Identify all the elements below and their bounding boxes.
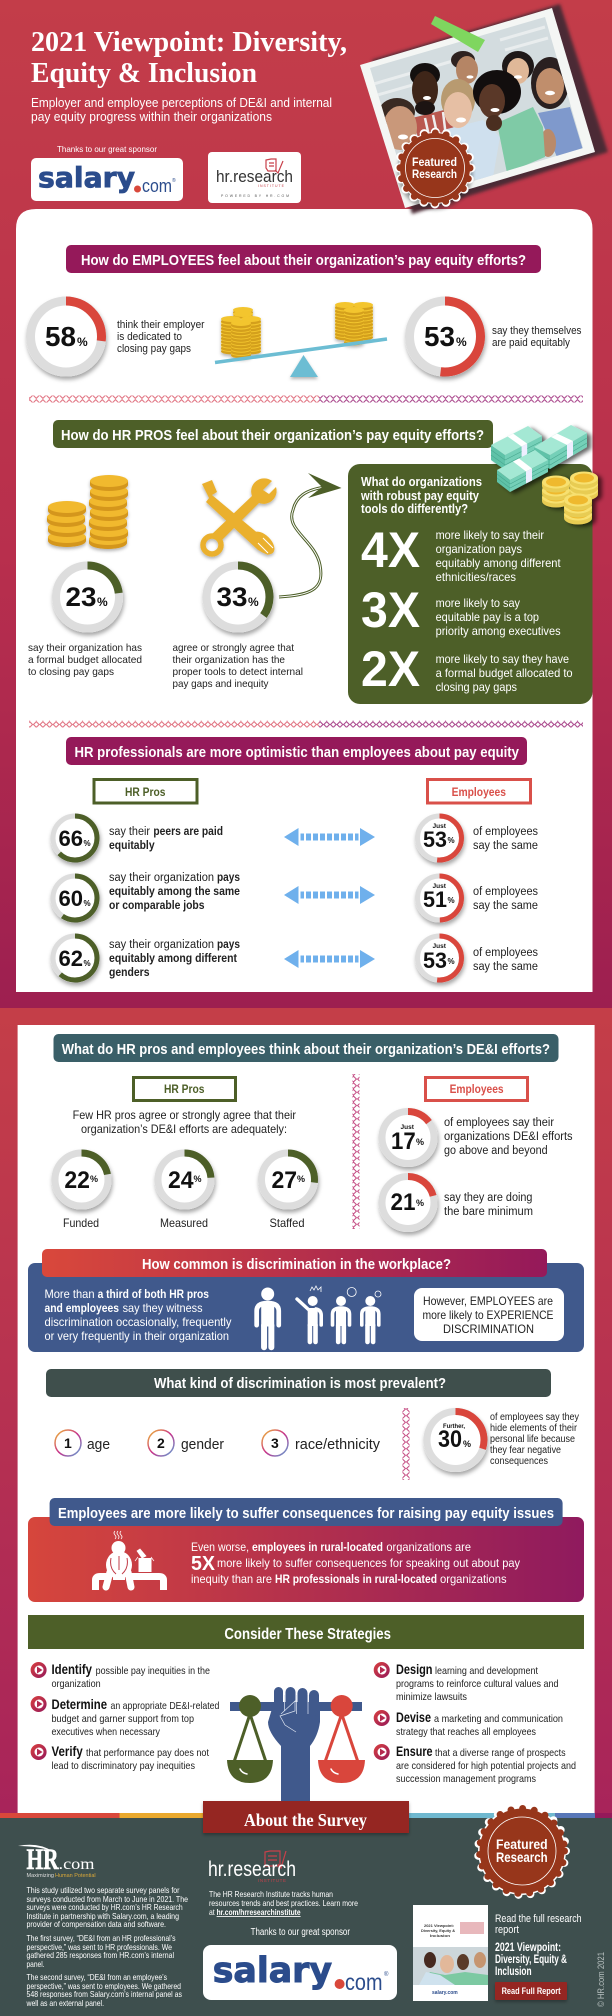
donut: 24 percent measured: Measured xyxy=(160,1216,208,1230)
text: read the full report: report xyxy=(495,1924,519,1936)
comparison row 3 employees: Just xyxy=(432,943,447,950)
text: 23 percent: a formal budget allocated xyxy=(28,654,142,666)
logo: HR.com: HR xyxy=(26,1843,59,1876)
text: 53 percent: say they themselves xyxy=(492,325,582,337)
heading: consequences: Employees are more likely to suffer consequences for raising pay equity issues xyxy=(58,1505,554,1522)
heading: employees xyxy=(66,245,541,273)
stat: 4X xyxy=(361,522,561,584)
comparison row 3 employees: say the same xyxy=(473,961,538,973)
logo: hr research xyxy=(208,152,301,203)
text: 30 percent: hide elements of their xyxy=(490,1423,578,1434)
rank 3 race/ethnicity: race/ethnicity xyxy=(295,1436,380,1453)
panel: consequences xyxy=(28,1498,584,1602)
footer color strip xyxy=(0,1813,612,1818)
text: consequences: organizations are xyxy=(386,1540,471,1554)
arrow: tools to panel xyxy=(279,473,342,597)
comparison row 2 employees: say the same xyxy=(473,900,538,912)
donut: 33 percent: 33 xyxy=(216,582,248,612)
text: institute description: The HR Research Institute tracks human xyxy=(209,1889,333,1899)
donut: 21 percent xyxy=(378,1173,438,1232)
featured research badge footer: Featured xyxy=(496,1836,548,1852)
comparison row 2 employees: of employees xyxy=(473,886,538,898)
logo: salary.com footer: ® xyxy=(384,1971,389,1978)
donut: 21 percent: 21 xyxy=(390,1189,416,1216)
text: 23 percent: to closing pay gaps xyxy=(28,666,114,678)
comparison row 3 employees xyxy=(415,934,538,982)
text: consequences: more likely to suffer consequences for speaking out about pay xyxy=(217,1556,520,1570)
text: discrimination witness: say they witness xyxy=(123,1301,203,1315)
text: read the full report: Diversity, Equity & xyxy=(495,1954,567,1966)
logo: salary.com: ® xyxy=(172,177,176,184)
text: discrimination witness: a third of both HR pros xyxy=(98,1287,209,1301)
label: Employees xyxy=(426,1078,528,1100)
strategy: devise: a marketing and communication xyxy=(434,1713,563,1725)
comparison row 1 HR: equitably xyxy=(109,840,155,852)
stat: 4X: ethnicities/races xyxy=(436,570,516,584)
label: HR Pros xyxy=(94,780,197,803)
logo: salary.com: com xyxy=(142,176,172,196)
comparison row 1 employees: % xyxy=(448,836,455,845)
text: study description: well as an external panel. xyxy=(26,1999,104,2008)
rank 2 gender: gender xyxy=(181,1436,224,1453)
comparison row 3 HR: say their organization xyxy=(109,939,214,951)
heading: consequences xyxy=(50,1498,563,1526)
donut: 53 percent xyxy=(405,296,485,376)
text: few HR pros: organization’s DE&I efforts are adequately: xyxy=(81,1122,287,1136)
button: read full report: Read Full Report xyxy=(502,1986,561,1997)
comparison row 3 HR: % xyxy=(84,959,91,968)
stat: 4X: 4X xyxy=(361,522,420,578)
strategy: determine: an appropriate DE&I-related xyxy=(110,1700,220,1712)
report cover thumbnail: 2021 Viewpoint: xyxy=(424,1923,454,1928)
report cover thumbnail: Diversity, Equity & xyxy=(421,1928,455,1933)
logo: hr research footer: INSTITUTE xyxy=(258,1878,286,1883)
strategy: devise: strategy that reaches all employees xyxy=(396,1726,536,1738)
strategy: ensure: that a diverse range of prospects xyxy=(435,1747,566,1759)
text: study description: provider of compensation data and software. xyxy=(26,1920,166,1929)
icon: coin stacks xyxy=(47,475,128,549)
icon: gold coins on panel xyxy=(542,472,598,524)
sponsor thanks text: Thanks to our great sponsor xyxy=(57,144,157,154)
comparison row 3 HR: 62 xyxy=(58,946,83,971)
donut: 30 percent xyxy=(424,1408,488,1472)
stat: 4X: equitably among different xyxy=(436,556,561,570)
donut: 21 percent: % xyxy=(416,1198,424,1208)
icon: sitting person xyxy=(96,1531,164,1590)
comparison row 3 HR: genders xyxy=(109,967,150,979)
stat: 2X: 2X xyxy=(361,641,420,697)
donut: 24 percent measured: % xyxy=(194,1174,202,1184)
donut: 27 percent staffed: 27 xyxy=(272,1167,297,1194)
text: 30 percent: of employees say they xyxy=(490,1412,579,1423)
text: 30 percent: personal life because xyxy=(490,1434,575,1445)
donut: 27 percent staffed xyxy=(258,1150,318,1230)
callout: experience discrimination: more likely to EXPERIENCE xyxy=(422,1308,554,1322)
donut: 30 percent: 30 xyxy=(438,1426,462,1453)
subtitle: pay equity progress within their organizations xyxy=(31,109,272,124)
heading: discrimination xyxy=(42,1249,547,1277)
logo: hr research footer xyxy=(208,1851,296,1883)
text: study description: panel. xyxy=(26,1960,44,1969)
strategy: design: minimize lawsuits xyxy=(396,1691,467,1703)
green panel: robust tools: with robust pay equity xyxy=(360,488,480,503)
comparison row 2 employees: Just xyxy=(432,883,447,890)
text: 33 percent: proper tools to detect internal xyxy=(172,666,303,678)
strategy: determine: executives when necessary xyxy=(52,1726,161,1738)
label: HR Pros: HR Pros xyxy=(164,1082,205,1096)
ribbon: about the survey xyxy=(203,1801,409,1833)
text: few HR pros: Few HR pros agree or strongly agree that their xyxy=(73,1108,296,1122)
heading: HR pros: How do HR PROS feel about their organization’s pay equity efforts? xyxy=(61,427,484,444)
rank 3 race/ethnicity xyxy=(262,1430,380,1456)
stat: 2X: closing pay gaps xyxy=(436,680,517,694)
text: study description: perspective,” was sent to HR professionals. We xyxy=(26,1943,172,1952)
donut: 23 percent: 23 xyxy=(66,582,96,612)
donut: 58 percent: 58 xyxy=(45,321,76,352)
text: 58 percent: closing pay gaps xyxy=(117,343,191,355)
icon: wrench and fork crossed xyxy=(202,478,279,559)
callout: experience discrimination: However, EMPLOYEES are xyxy=(423,1294,553,1308)
heading: HR pros xyxy=(53,420,493,448)
text: study description: This study utilized two separate survey panels for xyxy=(26,1886,180,1895)
subtitle: Employer and employee perceptions of DE&I and internal xyxy=(31,95,332,110)
stat: 4X: organization pays xyxy=(436,542,522,556)
featured research badge xyxy=(397,132,473,210)
label: Employees: Employees xyxy=(450,1082,504,1096)
text: study description: 548 responses from Salary.com’s internal panel as xyxy=(26,1990,182,1999)
comparison row 1 HR: 66 xyxy=(58,826,83,851)
text: consequences: Even worse, xyxy=(191,1540,249,1554)
comparison row 1 HR: % xyxy=(84,839,91,848)
text: 58 percent: think their employer xyxy=(117,319,205,331)
callout: experience discrimination: DISCRIMINATION xyxy=(443,1322,534,1336)
donut: 17 percent: % xyxy=(416,1137,424,1147)
text: discrimination witness: discrimination occasionally, frequently xyxy=(44,1315,232,1329)
logo: HR.com: Maximizing xyxy=(26,1873,54,1879)
text: consequences: HR professionals in rural-located xyxy=(275,1572,437,1586)
comparison row 1 employees: 53 xyxy=(423,827,447,852)
icon: fist holding scales xyxy=(227,1687,365,1803)
label: Employees xyxy=(428,780,530,803)
comparison row 2 HR: or comparable jobs xyxy=(109,900,204,912)
strategy: design: Design xyxy=(396,1661,432,1677)
text: institute description: hr.com/hrresearchinstitute xyxy=(217,1907,301,1917)
text: study description xyxy=(26,1886,188,2008)
strategy: identify: organization xyxy=(52,1678,101,1690)
stat: 4X: more likely to say their xyxy=(436,528,544,542)
text: 53 percent: are paid equitably xyxy=(492,337,570,349)
text: 17 percent: go above and beyond xyxy=(444,1145,548,1157)
strategy: verify: that performance pay does not xyxy=(86,1747,209,1759)
strategy: determine: budget and garner support from top xyxy=(52,1713,194,1725)
sponsor thanks footer: Thanks to our great sponsor xyxy=(251,1927,351,1938)
strategy: verify xyxy=(31,1743,209,1772)
donut: 17 percent: Just xyxy=(400,1124,415,1131)
copyright: © HR.com 2021 xyxy=(596,1952,606,2007)
text: consequences: employees in rural-located xyxy=(252,1540,383,1554)
comparison row 3 employees: of employees xyxy=(473,947,538,959)
text: study description: surveys conducted from March to June in 2021. The xyxy=(26,1895,188,1904)
comparison row 2 HR: pays xyxy=(217,872,240,884)
title: Equity & Inclusion xyxy=(31,57,257,89)
rank 2 gender xyxy=(148,1430,224,1456)
text: read the full report: 2021 Viewpoint: xyxy=(495,1942,561,1954)
heading: prevalent xyxy=(46,1369,551,1397)
donut: 22 percent funded: % xyxy=(90,1174,98,1184)
text: 58 percent: is dedicated to xyxy=(117,331,182,343)
donut: 24 percent measured: 24 xyxy=(168,1167,194,1194)
stat: 2X xyxy=(361,641,573,697)
heading: optimism xyxy=(66,737,527,765)
comparison row 1 HR: say their xyxy=(109,826,150,838)
donut: 33 percent xyxy=(202,562,274,632)
donut: 23 percent xyxy=(52,562,123,632)
text: 17 percent: of employees say their xyxy=(444,1117,554,1129)
strategy: verify: lead to discriminatory pay inequities xyxy=(52,1760,195,1772)
donut: 24 percent measured xyxy=(154,1150,214,1230)
text: discrimination witness: and employees xyxy=(44,1301,119,1315)
strategy: design: learning and development xyxy=(435,1665,538,1677)
donut: 22 percent funded xyxy=(52,1150,112,1230)
donut: 22 percent funded: 22 xyxy=(64,1167,90,1194)
strategy: ensure: are considered for high potential projects and xyxy=(396,1760,576,1772)
featured research badge: Featured xyxy=(412,155,457,169)
green panel: robust tools: tools do differently? xyxy=(361,501,468,516)
logo: salary.com footer: com xyxy=(345,1969,382,1995)
strategy: devise xyxy=(374,1709,563,1738)
strategy: design: programs to reinforce cultural values and xyxy=(396,1678,559,1690)
stat: 3X: more likely to say xyxy=(436,596,520,610)
icon: people xyxy=(257,1286,381,1347)
text: 33 percent: their organization has the xyxy=(172,654,285,666)
comparison row 2 employees xyxy=(415,874,538,922)
rank 2 gender: 2 xyxy=(157,1435,165,1451)
stat: 3X xyxy=(361,582,561,638)
label: HR Pros: HR Pros xyxy=(125,785,166,799)
logo: hr research: POWERED BY HR.COM xyxy=(221,194,289,198)
strategy: ensure xyxy=(374,1743,576,1785)
icon: seesaw with coins xyxy=(215,302,387,377)
donut: 58 percent xyxy=(26,296,106,376)
text: 53 percent xyxy=(492,325,582,349)
panel: discrimination xyxy=(28,1249,584,1352)
text: 33 percent: agree or strongly agree that xyxy=(172,642,294,654)
comparison row 1 employees xyxy=(415,814,538,862)
label: Employees: Employees xyxy=(452,785,506,799)
text: consequences: inequity than are xyxy=(191,1572,272,1586)
comparison row 3 employees: % xyxy=(448,957,455,966)
stat: 3X: equitable pay is a top xyxy=(436,610,539,624)
text: few HR pros xyxy=(73,1108,296,1136)
text: study description: surveys were conducted by HR.com’s HR Research xyxy=(26,1903,183,1912)
text: study description: The second survey, “DE&I from an employee’s xyxy=(26,1973,167,1982)
text: 30 percent xyxy=(490,1412,579,1467)
stat: 2X: a formal budget allocated to xyxy=(436,666,573,680)
title: 2021 Viewpoint: Diversity, xyxy=(31,26,347,58)
logo: salary.com xyxy=(31,158,183,201)
donut: 53 percent: 53 xyxy=(424,321,455,352)
green panel: robust tools: What do organizations xyxy=(361,474,482,489)
donut: 17 percent: 17 xyxy=(391,1128,416,1155)
title xyxy=(31,26,347,89)
text: 33 percent: pay gaps and inequity xyxy=(172,678,269,690)
strategy: determine: Determine xyxy=(52,1696,107,1712)
text: 21 percent xyxy=(444,1192,533,1218)
icon: money stacks xyxy=(491,425,587,492)
text: 23 percent xyxy=(28,642,142,678)
text: 21 percent: say they are doing xyxy=(444,1192,532,1204)
footer background xyxy=(0,1816,612,2016)
label: HR Pros xyxy=(134,1078,236,1100)
text: read the full report xyxy=(495,1913,582,1978)
rank 1 age xyxy=(55,1430,110,1456)
white panel: pay equity section xyxy=(16,209,592,992)
donut: 22 percent funded: Funded xyxy=(63,1216,99,1230)
featured research badge footer: Research xyxy=(496,1849,548,1865)
comparison row 3 HR: pays xyxy=(217,939,240,951)
text: institute description xyxy=(209,1889,358,1917)
comparison row 1 employees: of employees xyxy=(473,826,538,838)
text: 30 percent: they fear negative xyxy=(490,1445,561,1456)
logo: HR.com: .com xyxy=(58,1856,95,1873)
comparison row 3 employees: 53 xyxy=(423,948,447,973)
donut: 27 percent staffed: % xyxy=(297,1174,305,1184)
donut: 30 percent: % xyxy=(463,1439,471,1449)
text: 17 percent xyxy=(444,1117,573,1157)
comparison row 1 HR: peers are paid xyxy=(153,826,223,838)
text: 23 percent: say their organization has xyxy=(28,642,142,654)
comparison row 2 HR: % xyxy=(84,899,91,908)
text: 17 percent: organizations DE&I efforts xyxy=(444,1131,573,1143)
logo: HR.com xyxy=(18,1843,96,1879)
text: discrimination witness: or very frequently in their organization xyxy=(44,1329,229,1343)
comparison row 2 HR: 60 xyxy=(58,886,83,911)
donut: 27 percent staffed: Staffed xyxy=(270,1216,304,1230)
logo: salary.com footer: salary xyxy=(213,1951,332,1991)
strategy: determine xyxy=(31,1696,220,1738)
featured research badge: Research xyxy=(412,167,457,181)
page background: top section xyxy=(0,0,612,1008)
text: study description: gathered 285 responses from HR.com’s internal xyxy=(26,1951,174,1960)
text: 33 percent xyxy=(172,642,303,690)
donut: 53 percent: % xyxy=(456,335,467,349)
text: discrimination witness xyxy=(44,1287,232,1343)
text: 21 percent: the bare minimum xyxy=(444,1206,533,1218)
strategy: design xyxy=(374,1661,559,1703)
comparison row 2 HR: say their organization xyxy=(109,872,214,884)
text: study description: The first survey, “DE&I from an HR professional’s xyxy=(26,1934,176,1943)
text: consequences: 5X xyxy=(191,1553,216,1575)
strategy: devise: Devise xyxy=(396,1709,431,1725)
comparison row 1 employees: Just xyxy=(432,823,447,830)
comparison row 2 HR xyxy=(50,872,240,922)
text: consequences xyxy=(191,1540,520,1586)
page background: second section xyxy=(0,1008,612,1816)
logo: hr research footer: hr.research xyxy=(208,1858,296,1881)
report cover thumbnail: salary.com xyxy=(432,1990,458,1996)
stat: 3X: 3X xyxy=(361,582,420,638)
strategy: ensure: succession management programs xyxy=(396,1773,536,1785)
donut: 17 percent xyxy=(378,1108,438,1167)
comparison row 2 employees: % xyxy=(448,896,455,905)
heading: employees: How do EMPLOYEES feel about their organization’s pay equity efforts? xyxy=(81,252,526,269)
logo: salary.com: salary xyxy=(38,161,135,194)
comparison row 2 employees: 51 xyxy=(423,887,447,912)
text: institute description: resources trends and best practices. Learn more xyxy=(209,1898,358,1908)
donut: 30 percent: Further, xyxy=(443,1423,465,1430)
strategy: verify: Verify xyxy=(52,1743,83,1759)
donut: 58 percent: % xyxy=(77,335,88,349)
report cover thumbnail: Inclusion xyxy=(430,1933,451,1938)
strategy: ensure: Ensure xyxy=(396,1743,433,1759)
text: 30 percent: consequences xyxy=(490,1456,548,1467)
heading: strategies: Consider These Strategies xyxy=(224,1626,391,1643)
ribbon: about the survey: About the Survey xyxy=(244,1810,367,1830)
button: read full report xyxy=(495,1982,567,2000)
comparison row 3 HR: equitably among different xyxy=(109,953,237,965)
text: read the full report: Read the full research xyxy=(495,1913,582,1925)
logo: hr research: INSTITUTE xyxy=(258,184,285,188)
rank 3 race/ethnicity: 3 xyxy=(271,1435,279,1451)
text: study description: perspective,” was sent to employees. We gathered xyxy=(26,1982,181,1991)
heading: optimism: HR professionals are more optimistic than employees about pay equity xyxy=(74,744,520,761)
stat: 3X: priority among executives xyxy=(436,624,561,638)
text: institute description: at xyxy=(209,1907,215,1917)
heading: discrimination: How common is discrimination in the workplace? xyxy=(142,1256,451,1273)
logo: HR.com: Human Potential xyxy=(55,1873,96,1879)
rank 1 age: 1 xyxy=(64,1435,72,1451)
green panel: robust tools xyxy=(348,464,592,704)
heading: strategies xyxy=(28,1615,584,1649)
arrow: comparison row 2 xyxy=(284,886,375,904)
heading: DE&I efforts: What do HR pros and employees think about their organization’s DE&I efforts? xyxy=(62,1041,550,1058)
text: read the full report: Inclusion xyxy=(495,1966,532,1978)
strategy: identify: possible pay inequities in the xyxy=(96,1665,210,1677)
logo: salary.com footer xyxy=(203,1945,397,2000)
text: discrimination witness: More than xyxy=(44,1287,94,1301)
comparison row 3 HR xyxy=(50,934,240,982)
heading: DE&I efforts xyxy=(54,1034,558,1062)
text: 58 percent xyxy=(117,319,205,355)
logo: hr research: hr.research xyxy=(216,167,293,186)
strategy: identify xyxy=(31,1661,210,1690)
arrow: comparison row 3 xyxy=(284,950,375,968)
strategy: identify: Identify xyxy=(52,1661,92,1677)
comparison row 1 HR xyxy=(50,814,223,862)
arrow: comparison row 1 xyxy=(284,828,375,846)
donut: 23 percent: % xyxy=(97,595,108,609)
subtitle xyxy=(31,95,332,124)
featured research badge footer xyxy=(478,1807,566,1895)
featured photo xyxy=(360,4,608,214)
callout: experience discrimination xyxy=(414,1288,564,1341)
white panel: DE&I section xyxy=(18,1025,595,1815)
stat: 2X: more likely to say they have xyxy=(436,652,569,666)
comparison row 1 employees: say the same xyxy=(473,840,538,852)
comparison row 2 HR: equitably among the same xyxy=(109,886,240,898)
report cover thumbnail xyxy=(413,1905,488,2001)
text: study description: Institute in partnership with Salary.com, a leading xyxy=(26,1912,179,1921)
rank 1 age: age xyxy=(87,1436,110,1453)
donut: 33 percent: % xyxy=(248,595,259,609)
text: consequences: organizations xyxy=(440,1572,507,1586)
heading: prevalent: What kind of discrimination is most prevalent? xyxy=(154,1375,446,1392)
